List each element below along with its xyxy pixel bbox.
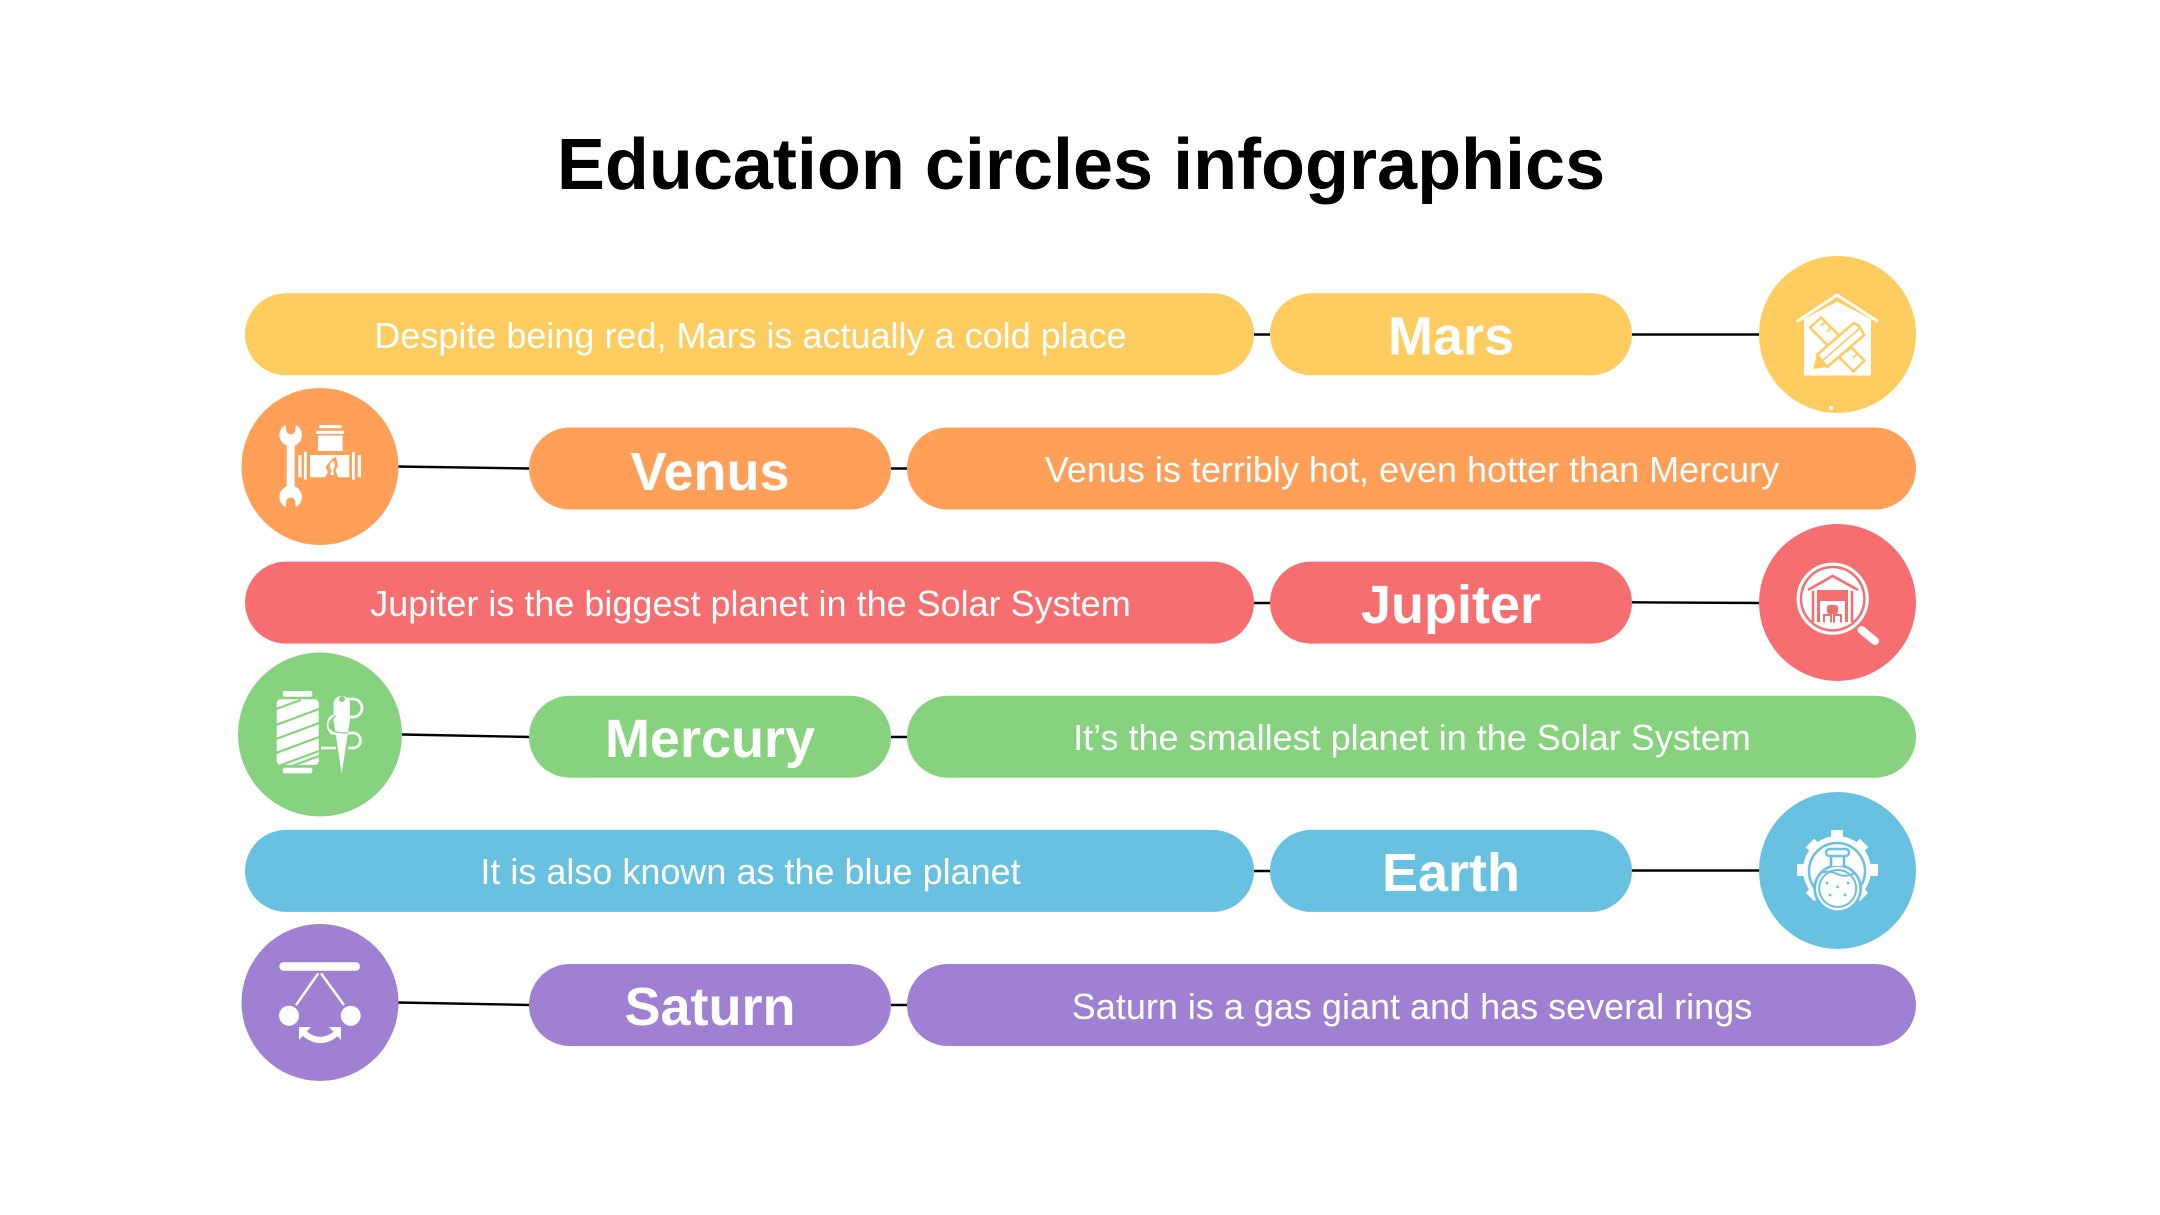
row: Mars xyxy=(245,256,1916,413)
icon: house with ruler and pencil xyxy=(1759,256,1916,413)
Venus description pill xyxy=(907,428,1916,510)
Earth name pill xyxy=(1270,830,1632,912)
icon: wrench and pipe xyxy=(242,388,398,545)
Saturn description pill xyxy=(907,964,1916,1046)
Saturn name pill xyxy=(529,964,891,1046)
Saturn name pill: Saturn xyxy=(624,977,796,1037)
row: Earth xyxy=(245,792,1916,949)
Mars description pill: Despite being red, Mars is actually a cold place xyxy=(374,315,1127,356)
row: Saturn xyxy=(242,924,1916,1081)
Venus description pill: Venus is terribly hot, even hotter than Mercury xyxy=(1045,449,1779,490)
row: Mercury xyxy=(238,652,1916,816)
icon: thread spool and needle xyxy=(238,652,402,816)
Jupiter description pill xyxy=(245,562,1254,644)
icon: warehouse under magnifier xyxy=(1759,524,1916,681)
icon: gear and flask xyxy=(1759,792,1916,949)
Earth name pill: Earth xyxy=(1382,843,1520,903)
Jupiter name pill: Jupiter xyxy=(1361,575,1541,635)
Jupiter name pill xyxy=(1270,562,1632,644)
Mercury name pill: Mercury xyxy=(605,709,815,769)
Saturn description pill: Saturn is a gas giant and has several rings xyxy=(1072,986,1752,1027)
Mercury description pill xyxy=(907,696,1916,778)
Mars name pill: Mars xyxy=(1388,306,1514,366)
Mercury name pill xyxy=(529,696,891,778)
row: Venus xyxy=(242,388,1916,545)
Mercury description pill: It’s the smallest planet in the Solar System xyxy=(1073,717,1751,758)
title: Education circles infographics xyxy=(557,125,1605,205)
icon: pendulum xyxy=(242,924,398,1081)
Jupiter description pill: Jupiter is the biggest planet in the Solar System xyxy=(370,583,1131,624)
Earth description pill: It is also known as the blue planet xyxy=(480,851,1021,892)
row: Jupiter xyxy=(245,524,1916,681)
Earth description pill xyxy=(245,830,1254,912)
Mars name pill xyxy=(1270,293,1632,375)
Venus name pill: Venus xyxy=(630,442,790,502)
Mars description pill xyxy=(245,293,1254,375)
Venus name pill xyxy=(529,428,891,510)
